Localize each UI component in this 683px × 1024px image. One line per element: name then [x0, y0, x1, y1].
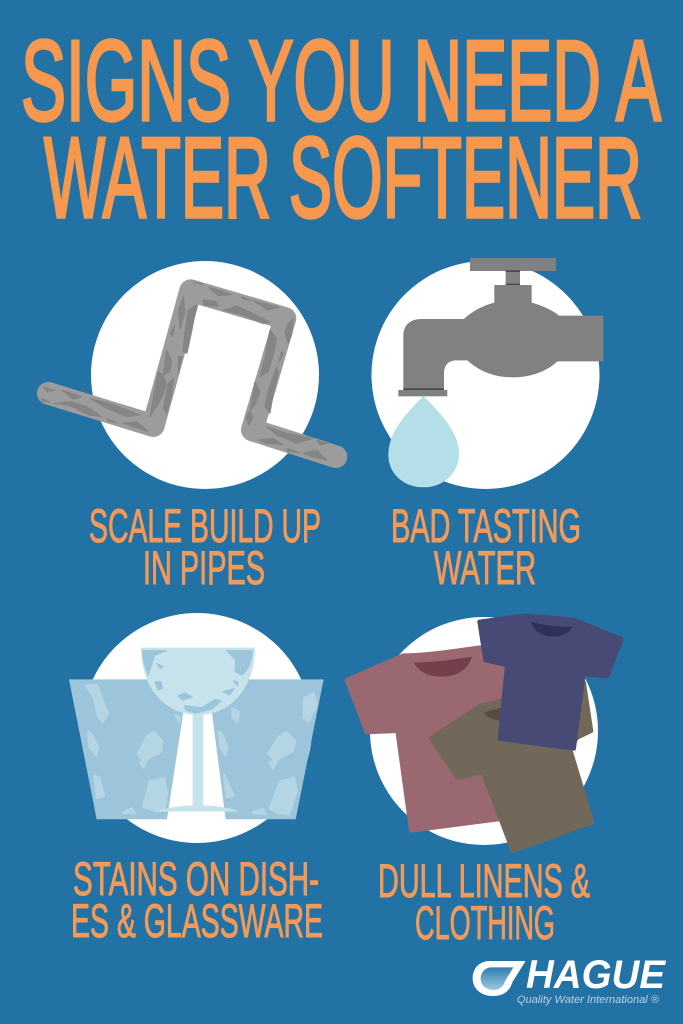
- logo: Hague: HAGUE: [526, 953, 666, 997]
- label: stains on dishes: STAINS ON DISH-: [73, 852, 319, 905]
- white circle: pipes: [91, 261, 319, 489]
- olive shirt: [431, 683, 592, 851]
- label: dull linens: [378, 854, 590, 949]
- white circle: glassware: [82, 613, 312, 843]
- label: scale build up: SCALE BUILD UP: [89, 499, 321, 552]
- icon: stained glasses: [69, 648, 324, 819]
- panel: dull linens: [347, 615, 622, 851]
- label: scale build up: IN PIPES: [143, 541, 265, 594]
- icon: scaled pipe: [42, 282, 336, 460]
- label: dull linens: CLOTHING: [415, 896, 555, 949]
- logo: Hague: [473, 953, 666, 1006]
- pink shirt: [347, 647, 513, 831]
- panel: scale build up in pipes: [42, 261, 336, 489]
- icon: faucet with drop: [388, 258, 603, 487]
- label: stains on dishes: ES & GLASSWARE: [71, 894, 323, 947]
- label: stains on dishes: [71, 852, 323, 947]
- label: bad tasting water: WATER: [434, 541, 536, 594]
- label: scale build up: [89, 499, 321, 594]
- navy shirt: [479, 615, 622, 749]
- icon: logo drop: [473, 961, 526, 996]
- panel: bad tasting water: [372, 258, 603, 489]
- logo: Hague: Quality Water International ®: [517, 994, 660, 1006]
- white circle: faucet: [372, 261, 600, 489]
- title: [21, 18, 661, 242]
- label: bad tasting water: [391, 499, 581, 594]
- panel: stains on dishes: [69, 613, 324, 843]
- white circle: clothing: [370, 617, 598, 845]
- icon: t-shirts: [347, 615, 622, 851]
